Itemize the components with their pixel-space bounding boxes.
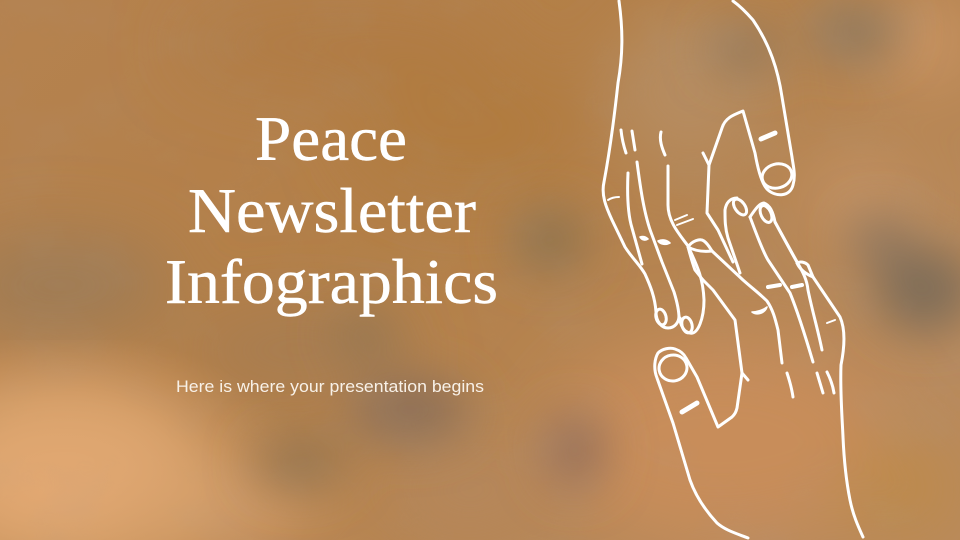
title: Peace: [255, 104, 407, 174]
title: Infographics: [165, 247, 498, 317]
bottom hand: [655, 197, 863, 538]
top hand: [603, 1, 795, 334]
illustration: two reaching hands: [603, 1, 863, 538]
subtitle: Here is where your presentation begins: [176, 377, 484, 396]
title: [165, 104, 498, 317]
title: Newsletter: [188, 176, 476, 246]
